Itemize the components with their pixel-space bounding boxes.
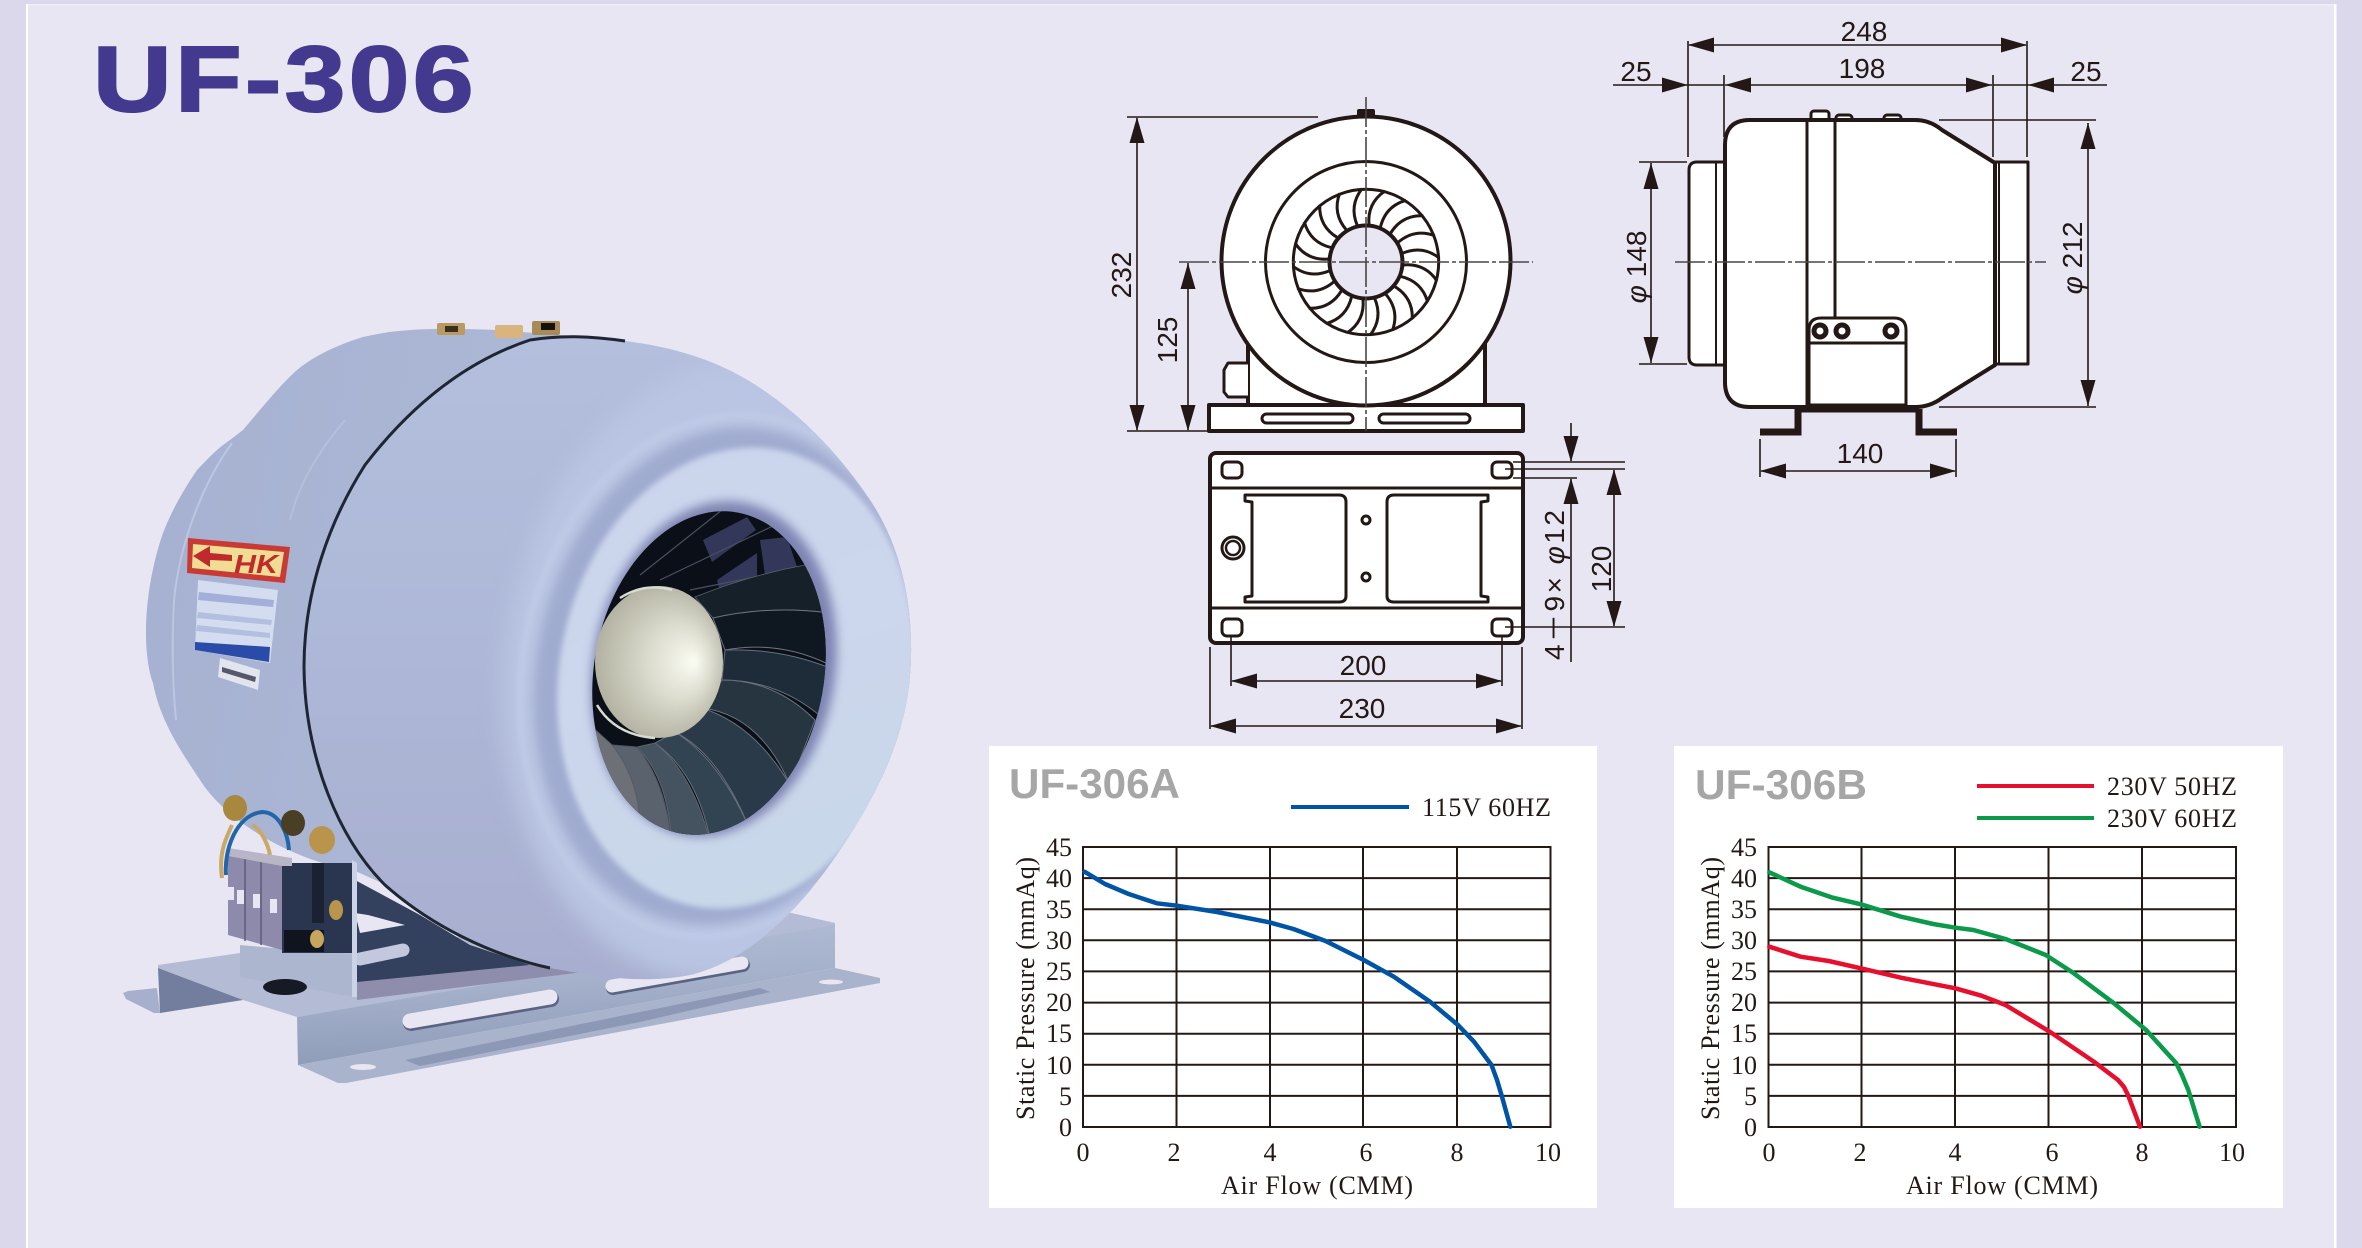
y axis labels B: 45 (1731, 833, 1757, 862)
x axis labels B (1762, 1138, 2245, 1167)
dimension 232 (1106, 117, 1318, 431)
grommet (1222, 537, 1244, 559)
axis titles A: Air Flow (CMM) (1221, 1171, 1413, 1200)
base flange (1209, 405, 1523, 431)
axis titles B: Static Pressure (mmAq) (1696, 857, 1725, 1120)
direction label (187, 538, 290, 583)
y axis labels A (1046, 833, 1072, 1142)
x axis labels A: 10 (1535, 1138, 1561, 1167)
y axis labels A: 25 (1046, 957, 1072, 986)
x axis labels B: 2 (1854, 1138, 1866, 1167)
left opening (1245, 495, 1346, 602)
drawing: base plate top view (1210, 423, 1625, 734)
impeller (592, 511, 826, 835)
x axis labels A: 2 (1168, 1138, 1180, 1167)
front housing shading and intake ring (503, 372, 912, 978)
dimension phi 148: φ 148 (1621, 231, 1652, 303)
dimension 200: 200 (1340, 650, 1386, 681)
x axis labels A: 4 (1264, 1138, 1276, 1167)
under-body bracket (355, 880, 640, 1000)
dimension 125: 125 (1152, 317, 1183, 363)
dimension 120 (1505, 469, 1625, 627)
y axis labels A: 30 (1046, 926, 1072, 955)
legend B: 230V 60HZ (2107, 804, 2237, 833)
x axis labels A: 0 (1076, 1138, 1090, 1167)
dimension phi 212: φ 212 (2057, 222, 2088, 294)
top terminal nuts (437, 321, 560, 338)
y axis labels B (1731, 833, 1757, 1142)
y axis labels B: 25 (1731, 957, 1757, 986)
axis titles A (1011, 857, 1413, 1200)
rear housing seam highlights (173, 420, 345, 720)
chart title B: UF-306B (1695, 761, 1867, 808)
band (1807, 120, 1835, 407)
legend A: 115V 60HZ (1422, 793, 1551, 822)
grid B (1768, 847, 2236, 1127)
axis titles A: Static Pressure (mmAq) (1011, 857, 1040, 1120)
drawing: side view (1613, 16, 2107, 478)
curve 230V 60HZ (1769, 872, 2200, 1127)
legend B (1977, 772, 2237, 833)
right opening (1387, 495, 1488, 602)
dimension 248 (1688, 16, 2027, 157)
direction label: HK (234, 549, 281, 579)
stand and junction box (1224, 343, 1485, 406)
right collar (1995, 162, 2028, 364)
x axis labels B: 6 (2046, 1138, 2058, 1167)
curve 230V 50HZ (1769, 947, 2140, 1127)
housing body (1725, 120, 1995, 407)
dimension 200 (1231, 636, 1502, 688)
dimension 25 right (1993, 56, 2107, 92)
dimension 232: 232 (1106, 252, 1137, 298)
fan front housing (304, 338, 911, 979)
dimension 230 (1210, 647, 1522, 734)
dimension phi 212 (1939, 120, 2096, 407)
panel: UF-306A chart (989, 746, 1597, 1208)
specification label (195, 580, 278, 663)
y axis labels B: 0 (1744, 1113, 1757, 1142)
housing circle (1222, 109, 1510, 406)
fan rear housing (146, 329, 623, 900)
x axis labels B: 8 (2136, 1138, 2148, 1167)
hole callout 4-9x12 (1505, 423, 1625, 662)
serial sticker (218, 658, 260, 690)
y axis labels A: 10 (1046, 1051, 1072, 1080)
grid A (1083, 847, 1550, 1127)
x axis labels B: 0 (1762, 1138, 1776, 1167)
y axis labels A: 15 (1046, 1019, 1072, 1048)
y axis labels B: 20 (1731, 988, 1757, 1017)
dimension 25 left: 25 (1620, 56, 1652, 87)
foot (1760, 409, 1957, 432)
x axis labels A (1076, 1138, 1561, 1167)
dimension phi 148 (1621, 162, 1687, 364)
x axis labels A: 6 (1360, 1138, 1372, 1167)
impeller blades (1293, 189, 1439, 335)
drawing: front view (1106, 97, 1533, 431)
fan seam (304, 337, 625, 968)
terminal box (221, 795, 357, 997)
x axis labels A: 8 (1450, 1138, 1464, 1167)
legend B: 230V 50HZ (2107, 772, 2237, 801)
x axis labels B: 10 (2219, 1138, 2245, 1167)
x axis labels B: 4 (1948, 1138, 1962, 1167)
y axis labels A: 45 (1046, 833, 1072, 862)
dimension 248: 248 (1841, 16, 1887, 47)
axis titles B: Air Flow (CMM) (1906, 1171, 2098, 1200)
dimension 25 left (1613, 56, 1724, 92)
panel: UF-306B chart (1674, 746, 2283, 1208)
y axis labels A: 40 (1046, 864, 1072, 893)
y axis labels B: 30 (1731, 926, 1757, 955)
axis titles B (1696, 857, 2098, 1200)
mounting base plate (123, 912, 880, 1083)
plate outline (1210, 453, 1523, 643)
dimension 198: 198 (1839, 53, 1885, 84)
terminal box (1809, 318, 1906, 405)
y axis labels B: 15 (1731, 1019, 1757, 1048)
curve 115V 60HZ (1084, 872, 1510, 1127)
y axis labels B: 40 (1731, 864, 1757, 893)
dimension 125 (1152, 263, 1196, 431)
dimension 198 (1724, 53, 1993, 157)
chart title A: UF-306A (1009, 760, 1180, 807)
y axis labels B: 35 (1731, 895, 1757, 924)
y axis labels B: 10 (1731, 1051, 1757, 1080)
side centre line (1675, 261, 2046, 263)
dimension 140: 140 (1837, 438, 1883, 469)
centre lines (1179, 97, 1533, 431)
dimension 25 right: 25 (2070, 56, 2102, 87)
inner collar lines (1716, 163, 1999, 364)
dimension 120: 120 (1586, 546, 1617, 592)
dimension 230: 230 (1339, 693, 1385, 724)
dimension 140 (1760, 438, 1956, 478)
y axis labels B: 5 (1744, 1082, 1757, 1111)
nose cone (595, 586, 723, 738)
centre pin holes (1362, 516, 1370, 581)
top nuts (1811, 111, 1901, 122)
y axis labels A: 20 (1046, 988, 1072, 1017)
y axis labels A: 5 (1059, 1082, 1072, 1111)
hole callout 4-9x12: 4－9× φ12 (1539, 510, 1570, 660)
y axis labels A: 0 (1059, 1113, 1072, 1142)
mounting holes (1222, 462, 1512, 636)
product photo: inline duct fan (123, 321, 912, 1083)
left collar (1689, 162, 1725, 365)
y axis labels A: 35 (1046, 895, 1072, 924)
title: UF-306 (93, 27, 477, 131)
